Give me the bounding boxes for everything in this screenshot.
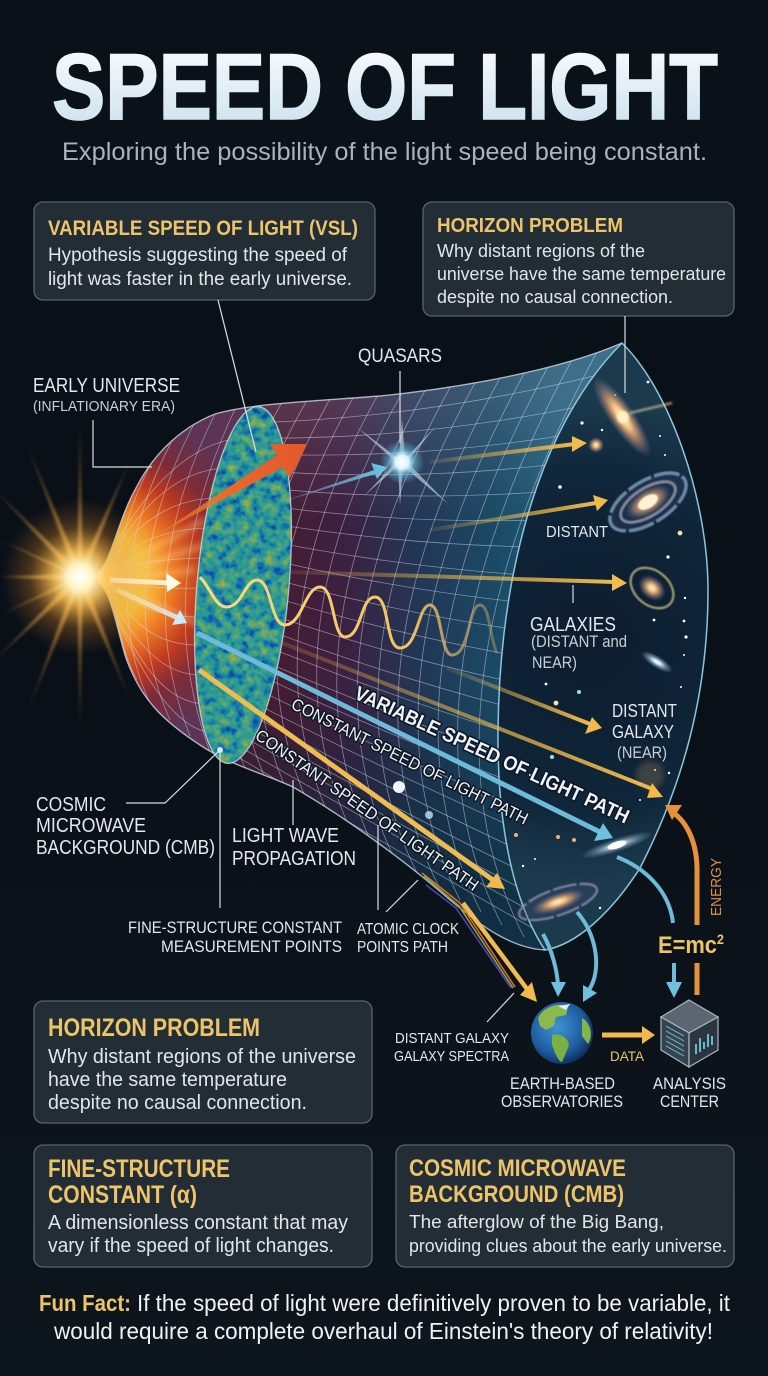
- arrow: white light: [110, 573, 181, 592]
- body: providing clues about the early universe.: [409, 1236, 727, 1256]
- body: [48, 245, 352, 290]
- body: light was faster in the early universe.: [48, 269, 352, 290]
- leader: spectra: [487, 993, 514, 1022]
- heading: [48, 1155, 230, 1209]
- body: [48, 1212, 348, 1257]
- galaxy: large spiral: [600, 461, 696, 543]
- label: early universe: (INFLATIONARY ERA): [33, 398, 175, 415]
- label: early universe: EARLY UNIVERSE: [33, 375, 180, 397]
- arrow: yellow to spiral: [430, 495, 608, 530]
- leader: fine-structure: [219, 750, 221, 908]
- label: earth-based observatories: [501, 1074, 623, 1111]
- light burst rays: [0, 405, 178, 745]
- atomic clock point: [393, 781, 405, 793]
- heading: HORIZON PROBLEM: [48, 1014, 260, 1042]
- leader: galaxies: [572, 585, 574, 603]
- arrow: constant path to earth: [463, 903, 537, 1002]
- label: distant galaxy near: [612, 701, 677, 762]
- core glow of early universe: [2, 499, 158, 655]
- label: distant galaxy near: GALAXY: [612, 722, 674, 742]
- heading: VARIABLE SPEED OF LIGHT (VSL): [48, 217, 358, 240]
- panel: fine-structure constant: [34, 1145, 372, 1267]
- label: atomic clock: POINTS PATH: [357, 939, 448, 956]
- label: distant: DISTANT: [546, 524, 608, 541]
- wave: light wave propagation: [200, 577, 497, 655]
- arrow: star to earth: [543, 934, 566, 997]
- arrow: blue to quasar: [272, 463, 387, 505]
- arrow: data: [602, 1026, 655, 1044]
- label: galaxies: NEAR): [532, 653, 577, 672]
- label: cosmic microwave background: MICROWAVE: [36, 815, 146, 837]
- galaxy: edge-on with jet: [584, 370, 672, 464]
- label: galaxy spectra: DISTANT GALAXY: [395, 1030, 509, 1047]
- galaxy: ringed spiral: [623, 560, 681, 616]
- quasar star: [358, 418, 448, 506]
- body: have the same temperature: [48, 1069, 287, 1091]
- body: [409, 1212, 727, 1256]
- cone outline: [98, 343, 622, 950]
- body: despite no causal connection.: [437, 287, 673, 307]
- label: light wave propagation: LIGHT WAVE: [232, 825, 339, 847]
- leader: horizon to mouth: [624, 316, 626, 393]
- galaxy: bright star cluster: [588, 437, 604, 453]
- body: despite no causal connection.: [48, 1092, 307, 1114]
- label: galaxies: [530, 614, 627, 672]
- label: early universe: [33, 375, 180, 415]
- label: earth-based observatories: EARTH-BASED: [510, 1074, 615, 1093]
- label: galaxies: GALAXIES: [530, 614, 616, 636]
- galaxy: lower spiral: [515, 876, 601, 928]
- path label: constant speed upper: CONSTANT SPEED OF LIGHT PATH: [288, 695, 531, 828]
- label: cosmic microwave background: BACKGROUND (CMB): [36, 837, 215, 859]
- marker dot: [217, 747, 223, 753]
- leader: atomic clock: [378, 825, 418, 912]
- label: atomic clock: ATOMIC CLOCK: [357, 921, 459, 938]
- arrow: yellow to star cluster: [430, 436, 587, 462]
- label: cosmic microwave background: COSMIC: [36, 794, 106, 816]
- body: [48, 1046, 356, 1114]
- body: universe have the same temperature: [437, 264, 726, 284]
- label: quasars: QUASARS: [358, 346, 442, 367]
- open mouth of cone with deep space: [498, 343, 708, 950]
- funnel diagram: spacetime cone: [0, 330, 708, 970]
- label: galaxy spectra: GALAXY SPECTRA: [394, 1048, 509, 1065]
- arrow: blue down to analysis: [666, 963, 682, 998]
- label: data: DATA: [610, 1048, 645, 1064]
- galaxy: near bluish streak: [579, 827, 655, 863]
- arrow: long yellow path: [257, 633, 663, 798]
- galaxy: small edge-on: [639, 647, 675, 677]
- arrow: energy orange: [665, 805, 697, 995]
- icon: earth: [531, 1002, 593, 1064]
- heading: BACKGROUND (CMB): [409, 1181, 624, 1208]
- body: The afterglow of the Big Bang,: [409, 1212, 664, 1232]
- path label: constant speed lower: CONSTANT SPEED OF LIGHT PATH: [252, 726, 482, 895]
- label: analysis center: CENTER: [660, 1092, 719, 1111]
- panel: cosmic microwave background: [396, 1145, 734, 1267]
- fun fact: [39, 1290, 731, 1344]
- arrow: yellow to ringed galaxy: [290, 572, 627, 591]
- body: Why distant regions of the universe: [48, 1046, 356, 1068]
- body: [437, 241, 726, 307]
- label: fine-structure points: [128, 918, 342, 956]
- label: galaxies: (DISTANT and: [531, 632, 627, 651]
- leader: VSL to CMB: [218, 300, 256, 452]
- leader: CMB: [126, 750, 220, 803]
- arrow: galaxy to analysis: [617, 857, 673, 923]
- body: Hypothesis suggesting the speed of: [48, 245, 348, 266]
- fun fact: would require a complete overhaul of Einstein's theory of relativity!: [53, 1318, 713, 1344]
- heading: CONSTANT (α): [48, 1181, 197, 1209]
- label: atomic clock: [357, 921, 459, 956]
- heading: FINE-STRUCTURE: [48, 1155, 230, 1183]
- subtitle: Exploring the possibility of the light speed being constant.: [62, 138, 707, 166]
- formula: E=mc2: 2: [717, 931, 724, 947]
- label: analysis center: ANALYSIS: [653, 1074, 726, 1093]
- label: analysis center: [653, 1074, 726, 1111]
- label: energy: ENERGY: [708, 858, 725, 916]
- label: fine-structure points: MEASUREMENT POINTS: [161, 937, 342, 956]
- arrow: red variable speed: [157, 444, 307, 535]
- spectra: rainbow galaxy spectrum trail: [422, 873, 515, 988]
- label: cosmic microwave background: [36, 794, 215, 859]
- heading: HORIZON PROBLEM: [437, 215, 623, 237]
- label: fine-structure points: FINE-STRUCTURE CONSTANT: [128, 918, 342, 937]
- arrow: pale blue light: [117, 590, 187, 625]
- label: light wave propagation: [232, 825, 356, 870]
- CMB disc: [182, 403, 304, 767]
- label: distant galaxy near: (NEAR): [617, 743, 667, 762]
- arrow: blue variable path: [197, 633, 613, 841]
- arrow: spiral to earth: [577, 912, 597, 1002]
- path label: variable speed: VARIABLE SPEED OF LIGHT PATH: [351, 683, 632, 828]
- label: light wave propagation: PROPAGATION: [232, 848, 356, 870]
- leader: light wave: [292, 780, 294, 825]
- formula: E=mc2: E=mc: [658, 932, 723, 959]
- icon: analysis center cube: [661, 1000, 718, 1067]
- leader: early universe: [93, 420, 152, 467]
- panel: horizon problem bottom: [34, 1001, 372, 1123]
- body: vary if the speed of light changes.: [48, 1235, 334, 1257]
- faint galaxy cluster in lower mouth: [636, 761, 664, 789]
- body: Why distant regions of the: [437, 241, 645, 261]
- body: A dimensionless constant that may: [48, 1212, 348, 1234]
- label: earth-based observatories: OBSERVATORIES: [501, 1092, 623, 1111]
- fun fact: If the speed of light were definitively proven to be variable, it: [137, 1290, 731, 1316]
- heading: COSMIC MICROWAVE: [409, 1155, 626, 1182]
- arrow: yellow to lower galaxy: [447, 668, 602, 734]
- heading: [409, 1155, 626, 1208]
- panel: horizon problem top: [423, 202, 734, 316]
- panel: variable speed of light: [34, 202, 375, 300]
- leader: quasars: [399, 371, 401, 443]
- fun fact: Fun Fact:: [39, 1290, 131, 1316]
- arrow: yellow constant path: [199, 670, 505, 889]
- label: galaxy spectra: [394, 1030, 509, 1065]
- label: distant galaxy near: DISTANT: [612, 701, 677, 721]
- cone surface: [96, 330, 640, 970]
